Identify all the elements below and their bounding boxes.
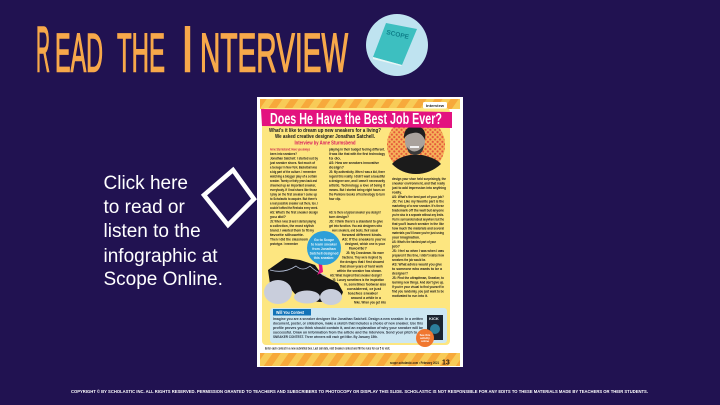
page number: 13 — [442, 360, 450, 366]
footer: copyright line: COPYRIGHT © BY SCHOLASTIC INC. ALL RIGHTS RESERVED. PERMISSION GRANTED TO TEACHERS AND SUBSCRIBERS TO PHOTOCOPY OR DISPLAY THIS SLIDE. SCHOLASTIC IS NOT RESPONSIBLE FOR ANY EDITS TO THESE MATERIALS MADE BY TEACHERS OR THEIR STUDENTS. — [71, 389, 648, 394]
article text: sneakers the job would be. — [392, 257, 426, 262]
contest text: successful. Draw on information from the article and the Interview. Send your pitch to — [273, 330, 418, 334]
article text: that show years of hard work — [340, 264, 384, 268]
title: EAD — [55, 22, 103, 84]
badge: contest prize: See this — [420, 333, 431, 337]
article text: in, sometimes footwear also — [344, 282, 386, 286]
contest text: profile proves you think should contain it, and an explanation of why your sneaker will be — [273, 325, 424, 330]
article text: tractions. They were inspired by — [342, 254, 382, 260]
article text: JS: I feel so when I was when I was — [392, 248, 445, 253]
title: R — [36, 12, 50, 86]
text: click here instruction: to read or — [104, 197, 185, 218]
article text: motivated to run into it. — [392, 293, 428, 298]
article text: forward different kinds. — [342, 232, 382, 237]
article text: learning new things. And don't give up. — [392, 280, 444, 284]
article text: AS: If the sneakers you've — [342, 236, 387, 242]
article text: JS: When I was 16 and I started playing — [270, 218, 316, 224]
article text: I play on the first sneaker I came up — [270, 192, 317, 196]
article text: JS: Find the ultrapitman, Sneaker, to — [392, 275, 444, 280]
tag: interview — [423, 102, 447, 108]
article text: AS: What's the hardest part of your — [392, 239, 436, 244]
contest text: document, poster, or slideshow, make a sketch that includes a choice of new sneaker. Use this — [273, 320, 423, 326]
article text: design? — [329, 164, 345, 170]
article text: teaches sneaker — [348, 290, 378, 296]
article text: JS: Luxury sometimes is the inspiration — [332, 277, 384, 282]
article text: a teenager in New York. Basketball was — [270, 164, 317, 170]
article text: AS: What's the best part of your job? — [392, 194, 444, 199]
article text: design your shoe held surprisingly, the — [392, 176, 447, 181]
article text: JS: My authenticity. When I was a kid, there — [329, 169, 386, 174]
contest text: SNEAKER CONTEST. Three winners will each get Nike. By January 15th. — [273, 334, 378, 339]
article text: to someone who wants to be a — [392, 266, 443, 271]
panel: contest — [270, 308, 447, 347]
banner headline: Does He Have the Best Job Ever? — [270, 111, 442, 128]
article text: considered, or just — [347, 286, 382, 291]
article text: been into sneakers? — [270, 151, 297, 156]
intro deck: Interview by Anne Sturmsbend — [294, 140, 356, 146]
article text: job? — [391, 244, 401, 248]
article text: around a while in a — [351, 295, 382, 300]
article text: JS: My Crossbeam. No more — [346, 250, 385, 255]
article text: means. But I started being eight hours on — [329, 187, 385, 192]
book cover thumbnail: KICK — [429, 316, 439, 321]
article text: a collection, the most stylish — [270, 223, 314, 228]
article text: just sneaker shoes. Not much of — [269, 160, 315, 165]
article text: Jonathan Satchell: I started out by — [270, 156, 319, 160]
badge: contest prize: online — [421, 339, 430, 343]
callout: sneaker fact: Satchell designed — [310, 252, 338, 256]
icon: diamond link marker — [204, 170, 254, 225]
intro deck — [269, 128, 381, 146]
article text: a designer one, and I wasn't necessarily — [329, 178, 386, 183]
article text: your imagination. — [392, 234, 420, 240]
article text: sneaker environment, and that really — [392, 180, 446, 186]
article text: you're also in a separate without any limits. — [392, 212, 444, 217]
text: click here instruction: listen to the — [104, 221, 201, 242]
article text: marketing of a new sneaker. It's these — [392, 203, 445, 208]
footer credit: scope.scholastic.com • February 2021 — [390, 361, 439, 365]
article text: the Pantone books of technology to turn — [329, 192, 385, 196]
article text: If you're your visual to find yourself in — [392, 284, 444, 289]
article text: trademark off the wall but anyone — [392, 208, 445, 212]
badge: contest prize — [416, 329, 434, 347]
icon: Scope magazine: SCOPE — [386, 29, 410, 41]
footer stripes — [260, 353, 460, 366]
callout: sneaker fact — [307, 231, 341, 275]
article text: Then I did the classroom — [270, 236, 308, 242]
article text: to Scholastic to acquire. But there's — [270, 196, 318, 201]
contest text — [273, 316, 424, 339]
title — [36, 12, 348, 86]
article text: how much the materials and several — [392, 226, 444, 230]
article text — [269, 146, 447, 304]
article text: that you'll launch sneaker in the like — [392, 221, 445, 226]
icon: Scope magazine — [366, 14, 428, 76]
article text: brand. I wanted them to fit my — [270, 228, 315, 232]
article text: a real possible sneaker out there, too. I — [270, 200, 318, 206]
intro deck: What's it like to dream up new sneakers for a living? — [269, 128, 381, 134]
article text: JS: I think there's a standard to give — [329, 218, 384, 224]
banner headline — [261, 109, 452, 128]
article text: to do. — [329, 156, 341, 160]
article text: really. — [392, 190, 402, 194]
article text: AS: What advice would you give — [392, 262, 443, 266]
title: NTERVIEW — [200, 22, 348, 84]
contest heading: Will You Contest — [276, 310, 305, 315]
badge: contest prize: activity — [420, 336, 430, 340]
article text: find you randomly, you just want to be — [392, 288, 445, 294]
article text: the designs that I first showed — [340, 259, 384, 264]
text: click here instruction: infographic at — [104, 246, 218, 267]
article text: dreamed up an important sneaker, — [270, 182, 316, 188]
article text: materials you'll know you're just using — [392, 230, 444, 235]
article text: JS: I've Like my favorite part is the — [392, 198, 445, 204]
article text: sneaker. Twenty or thirty years back and — [270, 178, 317, 183]
article text: prototype. I remember — [270, 241, 298, 246]
article text: a big part of the culture. I remember — [270, 169, 316, 174]
article text: just to add impression into anything — [391, 185, 446, 190]
tag: interview: Interview — [426, 103, 445, 108]
callout: sneaker fact: to learn sneaker — [311, 242, 338, 246]
article text: AS: How are sneakers innovative — [329, 160, 380, 165]
callout: sneaker fact: Go to Scope — [314, 238, 334, 242]
article text: favorite silhouette. — [270, 232, 304, 237]
article text: Nike. When you get into — [354, 300, 386, 304]
article text: AS: Is there a typical sneaker you design? — [329, 210, 381, 214]
illustration: sneaker — [264, 258, 343, 305]
article text: favorite? — [349, 246, 368, 250]
article text: designed, which one is your — [345, 241, 385, 246]
article text: everybody. If I had shoes like those — [270, 187, 318, 192]
article text: four clip. — [329, 196, 341, 201]
contest text: Imagine you are a sneaker designer like Jonathan Satchell. Design a new sneaker. In a written — [273, 316, 424, 321]
article text: AS: What's the first sneaker design — [270, 210, 318, 214]
article text: get into function. You ask designers who — [329, 223, 382, 228]
article text: Anne Sturmsbend: Have you always — [270, 146, 310, 152]
photo: designer portrait — [387, 116, 445, 174]
intro deck: We asked creative designer Jonathan Satchell. — [275, 134, 376, 140]
article text: couldn't afford the Reeboks every week. — [270, 205, 318, 210]
title: I — [181, 12, 194, 86]
text: click here instruction: Scope Online. — [104, 269, 223, 290]
article text: AS: What inspired that sneaker design? — [330, 272, 382, 278]
article text: You're surrounded about anywhere but the — [392, 216, 444, 222]
article text: you did? — [270, 214, 287, 219]
book cover thumbnail — [427, 315, 443, 340]
article text: designer? — [392, 270, 408, 276]
callout: sneaker fact: from Jonathan — [312, 247, 336, 251]
article text: watching a blogger play of a certain — [269, 174, 317, 178]
article text: artistic. Technology, a love of being it — [329, 182, 386, 188]
footnote: Enter each contest in a new submitted box. Last call date, visit Sneaker contest and fill the rules for our 5 to visit. — [265, 346, 390, 350]
title: THE — [117, 22, 165, 84]
article text: prepared it this time, I didn't realize how — [392, 252, 445, 258]
article text: within the sneaker has shown. — [336, 268, 382, 273]
article text: were sneakers, and boots, their casual — [331, 228, 378, 232]
yellow page background — [262, 108, 450, 345]
article text: regard this reality. I didn't want a beautiful — [329, 174, 385, 178]
panel: magazine page — [257, 97, 463, 367]
article text: playing in their budget feeling different. — [329, 146, 385, 152]
article text: turn design? — [329, 214, 349, 219]
header stripes — [260, 99, 460, 109]
callout: sneaker fact: this sneaker. — [314, 256, 334, 260]
article text: It was like that with the first technology — [329, 151, 386, 156]
contest heading — [273, 309, 311, 316]
text: click here instruction: Click here — [104, 173, 188, 194]
